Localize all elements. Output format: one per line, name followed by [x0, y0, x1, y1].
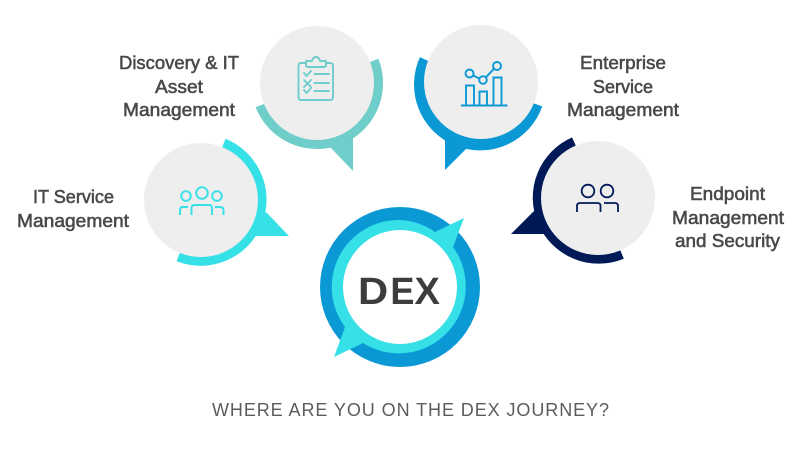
- bubble: Enterprise Service Management: [420, 25, 538, 170]
- label: IT Service Management: Management: [17, 210, 129, 231]
- label: Enterprise Service Management: Enterprise: [580, 52, 666, 73]
- DEX label: [358, 269, 440, 313]
- label: IT Service Management: [17, 186, 129, 231]
- label: Enterprise Service Management: Service: [593, 76, 653, 97]
- DEX label: D: [358, 271, 388, 313]
- icon: three people: [180, 187, 224, 215]
- bubble: Endpoint Management and Security: [511, 141, 655, 258]
- bubble: Discovery & IT Asset Management: [260, 26, 377, 171]
- label: Discovery & IT Asset Management: Discovery & IT: [119, 52, 239, 73]
- label: Endpoint Management and Security: Endpoint: [690, 183, 765, 204]
- tagline: WHERE ARE YOU ON THE DEX JOURNEY?: [212, 400, 609, 420]
- label: Discovery & IT Asset Management: Asset: [155, 76, 203, 97]
- label: Endpoint Management and Security: and Security: [675, 230, 781, 251]
- icon: clipboard checklist: [298, 57, 333, 100]
- label: Discovery & IT Asset Management: [119, 52, 239, 120]
- label: Enterprise Service Management: [567, 52, 679, 120]
- label: Enterprise Service Management: Management: [567, 99, 679, 120]
- label: Endpoint Management and Security: [672, 183, 784, 251]
- icon: two people: [577, 185, 618, 212]
- DEX label: E: [390, 269, 414, 312]
- DEX central badge: [320, 207, 480, 367]
- label: Endpoint Management and Security: Management: [672, 207, 784, 228]
- DEX label: X: [414, 271, 440, 313]
- label: Discovery & IT Asset Management: Management: [123, 99, 235, 120]
- bubble: IT Service Management: [144, 143, 289, 260]
- label: IT Service Management: IT Service: [33, 186, 114, 207]
- icon: bar chart with trend line: [461, 62, 508, 106]
